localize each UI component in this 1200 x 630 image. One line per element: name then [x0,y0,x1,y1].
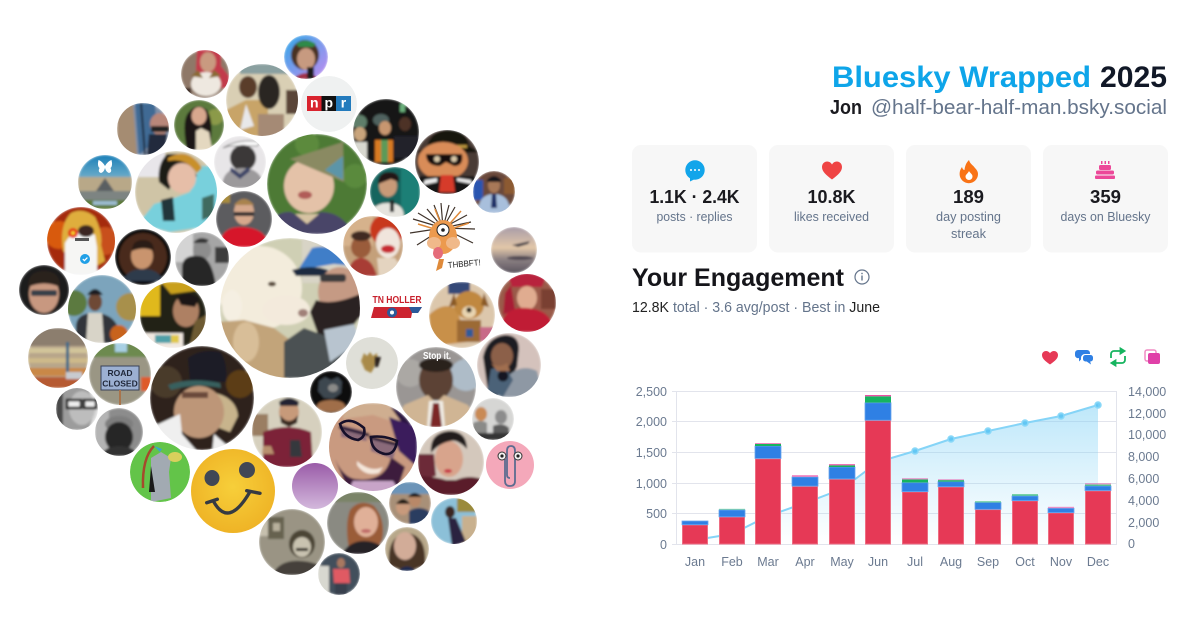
engagement summary: 12.8K total · 3.6 avg/post · Best in June [632,300,880,316]
avatar: hamburglar [415,130,479,194]
month labels: Aug [940,555,962,569]
right axis labels: 6,000 [1128,472,1159,486]
panel: likes received [769,145,894,252]
avatar cluster [19,35,556,595]
title: 2025 [1100,61,1167,94]
avatar: Clippy on pink [486,441,534,489]
month labels: Mar [757,555,779,569]
month labels: May [830,555,855,569]
bar: Oct [1012,494,1038,544]
avatar: Road Closed sign: ROAD [107,368,133,378]
avatar: crown on grey [346,337,398,389]
avatar: Bucky Katt cartoon [406,200,481,274]
icon: legend replies [1075,350,1093,364]
chart: monthly engagement [636,385,1166,569]
right axis labels: 12,000 [1128,407,1166,421]
avatar: man with goat [226,64,300,138]
bars [682,395,1111,544]
right axis labels: 14,000 [1128,385,1166,399]
left axis labels: 2,000 [636,415,667,429]
avatar: TN Holler logo: TN HOLLER [372,294,422,306]
avatar: Ronald McDonald and child [343,214,404,276]
user name and handle: Jon [830,97,862,119]
avatar: man with basketball [68,275,136,343]
icon: flame [960,160,978,183]
month labels: Nov [1050,555,1073,569]
panel: days on Bluesky: 359 [1090,186,1121,207]
avatar: New York Times building [28,328,88,388]
bar: Sep [975,501,1001,544]
chart grid [672,391,1116,545]
panel: day posting streak: day posting [936,209,1001,224]
avatar: purple gradient [292,463,338,509]
avatar: woman in red hood [498,273,556,332]
avatar: black and white man with big glasses [56,386,98,430]
right axis labels: 2,000 [1128,516,1159,530]
bar: Mar [755,443,781,544]
month labels: Apr [795,555,815,569]
avatar: courtside fans [353,99,419,165]
avatar: long-haired woman among leaves [174,100,224,150]
icon: legend likes [1042,351,1058,364]
avatar: Road Closed sign: CLOSED [102,378,138,388]
left axis labels [636,385,667,552]
avatar: red panda [310,371,352,413]
avatar: smiling couple [389,482,431,524]
avatar: woman in teal jacket and yellow beanie [135,151,220,233]
avatar: small tan dog [429,282,495,348]
month labels: Jun [868,555,888,569]
left axis labels: 2,500 [636,385,667,399]
panel: days on Bluesky [1043,145,1168,252]
left axis labels: 1,000 [636,477,667,491]
bar: Jul [902,478,928,544]
avatar: airplane window view [491,227,537,273]
avatar: woman in red blazer [216,191,272,247]
bar: Dec [1085,483,1111,544]
avatar: TN Holler logo [369,287,425,343]
avatar: npr [301,76,357,132]
avatar: smiling woman with long hair [385,527,429,571]
month labels: Jul [907,555,923,569]
avatar: man with dark border [115,229,171,285]
avatar: man with glasses in purple tones [323,403,417,493]
bar: Feb [719,509,745,544]
avatar: man with glasses [19,265,69,315]
avatar: man on gradient [284,35,328,79]
avatar: npr: r [341,94,347,110]
user name and handle: @half-bear-half-man.bsky.social [871,97,1167,119]
bar: Jun [865,395,891,544]
avatar: black and white hat figure [214,136,266,188]
avatar: Bucky Katt cartoon: THBBFT! [447,257,481,270]
avatar: man with mask by glass tower [117,103,170,155]
bar: Jan [682,521,708,544]
panel: day posting streak [906,145,1031,252]
panel: days on Bluesky: days on Bluesky [1060,209,1151,224]
month labels: Oct [1015,555,1035,569]
cumulative line [695,402,1101,540]
heading: Your Engagement: Your Engagement [632,264,845,292]
icon: legend reposts [1111,348,1125,366]
month labels: Jan [685,555,705,569]
panel: day posting streak: streak [951,226,986,241]
chart legend [1042,348,1160,366]
avatar: man in profile with yellow hat [140,282,206,348]
bar: Aug [938,479,964,544]
avatar: man with dreadlocks and watch [477,333,541,399]
panel: likes received: likes received [794,209,869,224]
avatar: baseball player in Mariners cap [150,346,254,454]
month labels: Sep [977,555,999,569]
bar: May [829,464,855,544]
avatar: eyepatch cartoon on fire [45,207,119,275]
avatar: grim reaper on green [130,442,190,502]
cumulative area [695,405,1098,544]
avatar: npr: p [325,94,333,110]
avatar: old sepia photo [259,509,328,575]
avatar: man in maroon shirt with mug [252,397,322,467]
panel: posts and replies: posts · replies [656,209,733,224]
left axis labels: 500 [646,507,667,521]
avatar: woman with dark hair [418,429,484,495]
month labels: Dec [1087,555,1109,569]
icon: heart [822,162,842,180]
avatar: big photo of man and golden dog [218,238,362,380]
panel: likes received: 10.8K [808,186,856,207]
avatar: Louvre with butterfly [78,155,132,209]
left axis labels: 1,500 [636,446,667,460]
right axis labels: 4,000 [1128,494,1159,508]
icon: speech bubble [685,160,705,182]
avatar: yellow smiley [191,449,275,533]
panel: posts and replies [632,145,757,252]
title: Bluesky Wrapped [832,61,1091,94]
icon: info [855,270,869,284]
bar: Apr [792,475,818,544]
avatar: woman by lake [431,498,477,546]
month labels [685,555,1109,569]
avatar: red-haired woman [327,492,389,554]
icon: birthday cake [1095,161,1115,179]
avatar: grey comic [472,398,514,440]
avatar: boy in party hat [267,132,367,234]
avatar: man in blue suit [473,171,515,213]
left axis labels: 0 [660,538,667,552]
avatar: Stop it meme: Stop it. [423,350,451,362]
panel: day posting streak: 189 [953,186,984,207]
right axis labels: 10,000 [1128,428,1166,442]
avatar: black and white bearded man [95,408,143,456]
avatar: Stop it meme [396,347,482,427]
panel: posts and replies: 1.1K · 2.4K [650,186,740,207]
avatar: man in red t-shirt [318,553,360,595]
month labels: Feb [721,555,743,569]
avatar: black and white man [175,232,229,286]
right axis labels: 0 [1128,537,1135,551]
avatar: npr: n [310,94,319,110]
right axis labels: 8,000 [1128,450,1159,464]
avatar: comedian by teal curtain [370,167,420,217]
right axis labels [1128,385,1166,551]
bar: Nov [1048,507,1074,544]
avatar: Road Closed sign [89,343,151,405]
icon: legend quotes [1145,350,1160,364]
avatar: man with cat [181,50,229,98]
